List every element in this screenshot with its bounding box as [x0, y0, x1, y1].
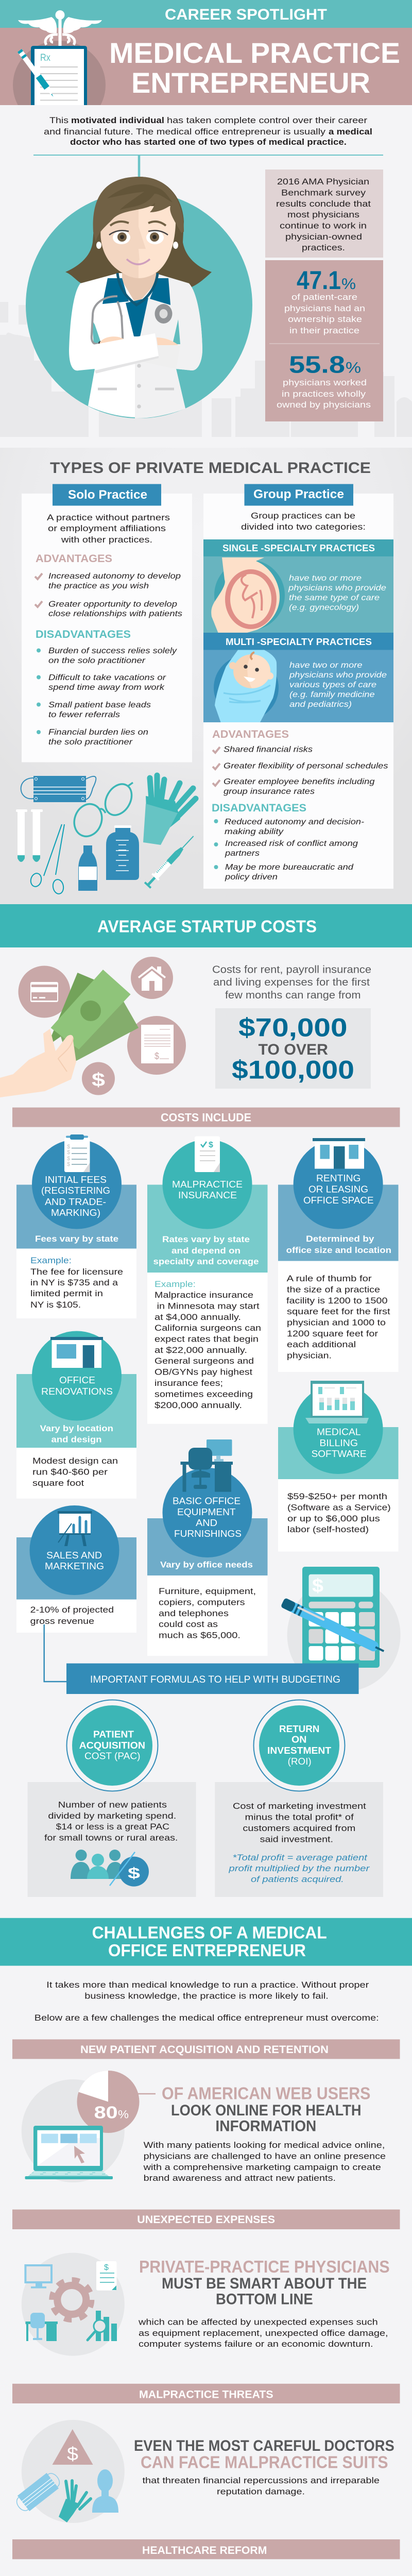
multi-specialty sub-panel	[203, 633, 393, 722]
panel: return on investment: RETURN	[279, 1724, 319, 1734]
icon: dollar	[82, 1062, 115, 1095]
stat panel: ownership percentages	[265, 260, 383, 421]
solo disadvantages: Financial burden lies on	[48, 728, 148, 737]
icon: gloves	[143, 775, 196, 845]
decorative icon: calculator and pen	[281, 1567, 401, 1692]
banner: important formulas: IMPORTANT FORMULAS TO HELP WITH BUDGETING	[90, 1674, 340, 1685]
single-specialty sub-panel: the same type of care	[289, 594, 380, 602]
cost card: basic office equipment and furnishings: could cost as	[159, 1619, 218, 1629]
intro paragraph: motivated individual	[71, 115, 164, 125]
cost card: medical billing software: labor (self-hosted)	[287, 1524, 369, 1534]
cost card: renting or leasing office space: A rule of thumb for	[287, 1274, 372, 1283]
cost card: basic office equipment and furnishings: much as $65,000.	[159, 1631, 241, 1640]
icon: gear, monitor, desk, chart: $	[104, 2263, 109, 2272]
solo advantages: Increased autonomy to develop	[48, 572, 181, 581]
group advantages: group insurance rates	[224, 787, 315, 796]
multi-specialty sub-panel: physicians who provide	[289, 671, 387, 680]
startup cost callout: few months can range from	[225, 990, 360, 1001]
solo disadvantages: on the solo practitioner	[48, 656, 146, 665]
icon: gear, monitor, desk, chart	[22, 2253, 125, 2356]
cost card: medical billing software: $59-$250+ per month	[287, 1492, 387, 1501]
stat: 55.8%: owned by physicians	[277, 400, 371, 410]
cost card: initial fees: The fee for licensure	[30, 1267, 123, 1277]
cost card: office renovations: square foot	[32, 1478, 84, 1488]
solo disadvantages: spend time away from work	[48, 683, 165, 692]
banner: costs include: COSTS INCLUDE	[161, 1111, 251, 1124]
cost card: office renovations: Vary by location	[40, 1423, 113, 1433]
stat: 47.1%: ownership stake	[288, 314, 362, 324]
banner: important formulas	[66, 1664, 358, 1694]
panel: patient acquisition cost	[28, 1700, 196, 1897]
panel: solo practice: or employment affiliations	[48, 523, 166, 533]
single-specialty sub-panel: (e.g. gynecology)	[289, 603, 359, 612]
panel: return on investment: INVESTMENT	[267, 1745, 331, 1756]
cost card: sales and marketing	[16, 1505, 136, 1633]
icon: syringe	[144, 833, 197, 889]
stethoscope	[117, 273, 158, 305]
cost card: basic office equipment and furnishings: and telephones	[159, 1608, 229, 1618]
single-specialty sub-panel	[203, 539, 393, 633]
header banner	[0, 0, 412, 105]
single-specialty sub-panel: have two or more	[289, 574, 362, 583]
single-specialty sub-panel: physicians who provide	[288, 584, 386, 592]
icon: medicine jar	[106, 825, 139, 880]
face	[100, 206, 139, 278]
cost card: initial fees: Fees vary by state	[35, 1234, 118, 1244]
footnote	[228, 1853, 370, 1884]
startup cost callout: $100,000	[232, 1055, 354, 1084]
cost card: basic office equipment and furnishings: Furniture, equipment,	[159, 1586, 256, 1596]
cost card: medical billing software: SOFTWARE	[312, 1449, 367, 1459]
cost card: initial fees: in NY is $735 and a	[30, 1278, 118, 1287]
cost card: malpractice insurance: MALPRACTICE	[172, 1179, 243, 1190]
solo disadvantages	[36, 629, 177, 747]
stat: 55.8%: physicians worked	[283, 378, 367, 387]
stat: 47.1%	[284, 266, 365, 335]
main title	[109, 37, 400, 99]
headline	[134, 2437, 394, 2472]
intro paragraph: This	[49, 115, 68, 125]
banner: healthcare reform	[12, 2539, 400, 2559]
icon: credit card	[19, 965, 70, 1018]
cost card: office renovations: run $40-$60 per	[32, 1467, 108, 1477]
panel: patient acquisition cost: Number of new patients	[58, 1800, 167, 1810]
icon: forceps	[29, 824, 64, 895]
cost card: office renovations: Modest design can	[32, 1456, 118, 1466]
panel: patient acquisition cost: ACQUISITION	[79, 1740, 145, 1751]
cost card: malpractice insurance: California surgeons can	[154, 1323, 261, 1333]
group disadvantages	[212, 802, 364, 882]
cost card: renting or leasing office space: physician and 1000 to	[287, 1318, 386, 1327]
footnote: *Total profit = average patient	[233, 1853, 368, 1862]
icon: insurance document: $	[209, 1141, 213, 1149]
group disadvantages: DISADVANTAGES	[212, 802, 306, 814]
panel: solo practice: Solo Practice	[68, 488, 147, 502]
cost card: malpractice insurance: insurance fees;	[154, 1378, 223, 1388]
banner: unexpected expenses: UNEXPECTED EXPENSES	[137, 2214, 275, 2226]
cost card: sales and marketing: gross revenue	[30, 1616, 94, 1626]
body text: as equipment replacement, unexpected office damage,	[139, 2328, 388, 2338]
icon: storefront	[50, 1337, 103, 1368]
cost card: initial fees: limited permit in	[30, 1289, 103, 1298]
headline: LOOK ONLINE FOR HEALTH	[171, 2102, 362, 2119]
panel: return on investment: minus the total profit* of	[245, 1812, 354, 1822]
cost card: malpractice insurance: Example:	[154, 1279, 196, 1289]
group advantages	[212, 728, 388, 796]
main title: ENTREPRENEUR	[131, 66, 370, 99]
headline: BOTTOM LINE	[216, 2291, 313, 2308]
panel: group practice: Group practices can be	[251, 511, 355, 521]
cost card: renting or leasing office space: OR LEASING	[308, 1184, 368, 1195]
challenges intro text: It takes more than medical knowledge to run a practice. Without proper	[46, 1980, 369, 1990]
main title: MEDICAL PRACTICE	[109, 37, 400, 69]
single-specialty sub-panel: SINGLE -SPECIALTY PRACTICES	[222, 543, 375, 553]
icon: fee checklist: $	[67, 1161, 70, 1167]
header kicker: CAREER SPOTLIGHT	[165, 6, 327, 23]
stat panel: AMA survey: 2016 AMA Physician	[277, 177, 369, 187]
body text: computer systems failure or an economic downturn.	[139, 2339, 373, 2349]
cost card: basic office equipment and furnishings: copiers, computers	[159, 1598, 245, 1607]
section band: average startup costs: AVERAGE STARTUP COSTS	[97, 917, 317, 936]
stat panel: AMA survey: continue to work in	[280, 221, 367, 231]
cost card: initial fees: AND TRADE-	[45, 1197, 106, 1207]
stat: 47.1%: 47.1	[297, 266, 341, 295]
solo advantages	[35, 553, 182, 618]
icon: billing laptop	[305, 1381, 369, 1423]
icon: prescription clipboard and caduceus: Rx	[40, 53, 50, 63]
icon: prescription clipboard and caduceus	[13, 10, 106, 105]
cost card: initial fees: MARKING)	[51, 1208, 100, 1218]
group disadvantages: making ability	[225, 827, 284, 836]
cost card: medical billing software: (Software as a Service)	[287, 1502, 391, 1512]
solo advantages: ADVANTAGES	[36, 553, 112, 565]
cost card: malpractice insurance	[147, 1137, 268, 1424]
stat: 55.8%: 55.8	[289, 351, 345, 378]
cost card: renting or leasing office space: 1200 square feet for	[287, 1329, 378, 1338]
stat panel: AMA survey: most physicians	[287, 210, 359, 219]
icon: bottle	[78, 845, 97, 891]
icon: fee checklist: $	[67, 1144, 70, 1150]
cost card: sales and marketing: MARKETING	[45, 1561, 104, 1571]
cost card: renting or leasing office space: the size of a practice	[287, 1285, 380, 1294]
panel: return on investment: said investment.	[260, 1834, 333, 1844]
doctor illustration	[26, 177, 252, 418]
skyline background	[0, 302, 412, 437]
panel: patient acquisition cost: divided by marketing spend.	[48, 1811, 176, 1821]
hair, back	[65, 177, 212, 287]
group disadvantages: Increased risk of conflict among	[225, 839, 358, 848]
cost card: malpractice insurance: and depend on	[171, 1246, 241, 1256]
cost card: renting or leasing office space: OFFICE SPACE	[303, 1195, 374, 1206]
icon: pregnant belly	[211, 557, 285, 633]
illustration: medical supplies	[16, 775, 197, 895]
startup cost callout: and living expenses for the first	[213, 977, 370, 988]
multi-specialty sub-panel: various types of care	[289, 681, 376, 689]
cost card: malpractice insurance: OB/GYNs pay highest	[154, 1367, 252, 1377]
icon: fee checklist: $	[67, 1149, 70, 1156]
panel: solo practice: with other practices.	[61, 535, 152, 545]
icon: surgical mask	[21, 776, 96, 802]
panel: patient acquisition cost: PATIENT	[93, 1730, 134, 1740]
headline: OF AMERICAN WEB USERS	[162, 2083, 370, 2103]
icon: laptop and 80% pie chart: 80	[94, 2103, 118, 2122]
cost card: malpractice insurance: at $22,000 annually.	[154, 1345, 247, 1355]
panel: return on investment	[215, 1700, 383, 1897]
body text: reputation damage.	[217, 2487, 305, 2497]
stat: 47.1%: of patient-care	[291, 292, 357, 302]
cost card: renting or leasing office space: physician.	[287, 1351, 332, 1361]
solo disadvantages: to fewer referrals	[48, 710, 120, 719]
coat pockets and buttons	[98, 364, 174, 409]
headline: PRIVATE-PRACTICE PHYSICIANS	[139, 2257, 390, 2276]
banner: healthcare reform: HEALTHCARE REFORM	[142, 2545, 267, 2556]
headline	[162, 2083, 370, 2134]
cost card: renting or leasing office space: Determined by	[306, 1234, 374, 1244]
panel: group practice: divided into two categories:	[241, 522, 366, 532]
banner: unexpected expenses	[12, 2210, 400, 2229]
intro paragraph: and financial future. The medical office entrepreneur is usually	[44, 127, 326, 137]
cost card: basic office equipment and furnishings: BASIC OFFICE	[173, 1496, 241, 1506]
stat: 55.8%	[277, 351, 371, 410]
cost card: medical billing software: MEDICAL	[317, 1427, 360, 1437]
solo disadvantages: the solo practitioner	[48, 738, 133, 747]
body text: brand awareness and attract new patients.	[144, 2173, 336, 2183]
startup cost callout: Costs for rent, payroll insurance	[212, 964, 371, 976]
heading: TYPES OF PRIVATE MEDICAL PRACTICE	[50, 460, 371, 477]
cost card: office renovations: and design	[52, 1434, 102, 1445]
stat: 55.8%: %	[346, 360, 361, 376]
cost card: malpractice insurance: in Minnesota may start	[157, 1301, 260, 1311]
neck and scrubs	[122, 273, 158, 305]
icon: laptop and 80% pie chart	[22, 2071, 156, 2182]
section: types of private medical practice	[0, 448, 412, 904]
panel: patient acquisition cost: COST (PAC)	[84, 1751, 140, 1761]
decorative icon: calculator and pen: $	[312, 1575, 323, 1596]
teal circle backdrop	[26, 192, 252, 418]
cost card: renting or leasing office space: square feet for the first	[287, 1307, 390, 1316]
body text: which can be affected by unexpected expenses such	[138, 2317, 378, 2327]
startup cost callout: $70,000	[238, 1013, 347, 1042]
body text: that threaten financial repercussions and irreparable	[142, 2476, 380, 2485]
solo disadvantages: Difficult to take vacations or	[48, 673, 166, 682]
illustration: hand holding money with expense icons	[0, 957, 186, 1097]
cost card: malpractice insurance: expect rates that begin	[154, 1334, 259, 1344]
stat: 47.1%: in their practice	[289, 326, 359, 335]
panel: patient acquisition cost: for small towns or rural areas.	[44, 1833, 178, 1843]
arrow: connector to formulas banner	[44, 1624, 66, 1682]
headline: MUST BE SMART ABOUT THE	[162, 2275, 367, 2292]
panel: solo practice: A practice without partners	[47, 513, 170, 522]
cost card: renting or leasing office space: facility is 1200 to 1500	[286, 1296, 387, 1306]
body text	[142, 2476, 380, 2497]
panel: group practice: Group Practice	[253, 487, 344, 501]
cost card: medical billing software: BILLING	[319, 1438, 358, 1448]
stat panel: AMA survey	[265, 170, 383, 258]
banner: malpractice threats: MALPRACTICE THREATS	[139, 2389, 273, 2401]
multi-specialty sub-panel: (e.g. family medicine	[289, 690, 375, 699]
icon: laptop and 80% pie chart: %	[118, 2108, 129, 2121]
cost card: initial fees: NY is $105.	[30, 1300, 81, 1310]
cost card: initial fees: Example:	[30, 1256, 72, 1265]
multi-specialty sub-panel: and pediatrics)	[289, 700, 352, 709]
cost card: renting or leasing office space: office size and location	[286, 1245, 391, 1255]
icon: banknotes in hand	[0, 970, 139, 1097]
section band: challenges: CHALLENGES OF A MEDICAL	[92, 1923, 327, 1942]
banner: new patient acquisition	[12, 2039, 400, 2059]
headline	[139, 2257, 390, 2308]
startup cost callout: TO OVER	[259, 1041, 328, 1058]
footnote: profit multiplied by the number	[228, 1863, 370, 1873]
cost card: initial fees: INITIAL FEES	[45, 1175, 107, 1185]
panel: return on investment: ON	[291, 1735, 306, 1745]
stat: 55.8%: in practices wholly	[282, 389, 366, 399]
cost card: malpractice insurance: General surgeons and	[154, 1356, 254, 1366]
solo disadvantages: Small patient base leads	[48, 701, 151, 709]
cost card: medical billing software: or up to $6,000 plus	[287, 1514, 380, 1523]
banner: costs include	[12, 1108, 400, 1127]
icon: presentation board	[58, 1511, 92, 1546]
challenges intro text: business knowledge, the practice is more likely to fail.	[84, 1991, 329, 2001]
icon: swaddled baby	[214, 650, 279, 722]
cost card: malpractice insurance: Malpractice insurance	[154, 1290, 253, 1300]
cost card: sales and marketing: SALES AND	[46, 1550, 102, 1561]
headline: CAN FACE MALPRACTICE SUITS	[141, 2453, 388, 2472]
cost card: office renovations: RENOVATIONS	[41, 1386, 113, 1397]
cost card: malpractice insurance: $200,000 annually.	[154, 1400, 242, 1410]
icon: invoice: $	[154, 1051, 159, 1061]
intro paragraph: doctor who has started one of two types of medical practice.	[70, 137, 347, 147]
body text: with a comprehensive marketing campaign to create	[143, 2162, 381, 2172]
headline: INFORMATION	[215, 2117, 316, 2134]
challenge: patient acquisition	[22, 2071, 386, 2183]
panel: return on investment: (ROI)	[288, 1756, 312, 1767]
headline: EVEN THE MOST CAREFUL DOCTORS	[134, 2437, 394, 2454]
challenge: malpractice threats	[13, 2420, 394, 2523]
challenges intro text: Below are a few challenges the medical office entrepreneur must overcome:	[35, 2013, 379, 2023]
multi-specialty sub-panel: have two or more	[289, 661, 363, 670]
stat: 47.1%: %	[341, 276, 356, 293]
cost card: malpractice insurance: specialty and coverage	[153, 1257, 259, 1266]
icon: fee checklist	[64, 1134, 90, 1172]
solo advantages: the practice as you wish	[48, 582, 149, 590]
cost card: basic office equipment and furnishings	[147, 1439, 268, 1656]
icon: patients and dollar	[71, 1850, 149, 1887]
icon: office building	[313, 1138, 365, 1168]
cost card: basic office equipment and furnishings: Vary by office needs	[160, 1560, 253, 1570]
group advantages: Greater flexibility of personal schedules	[224, 761, 388, 771]
section band: challenges	[0, 1918, 412, 1966]
cost card: office renovations: OFFICE	[59, 1375, 95, 1385]
section band: average startup costs	[0, 904, 412, 947]
icon: insurance document	[195, 1137, 220, 1172]
hair, front	[93, 177, 184, 242]
solo advantages: Greater opportunity to develop	[48, 600, 177, 609]
cost card: malpractice insurance: Rates vary by state	[162, 1234, 250, 1244]
eyes and brows	[109, 222, 168, 244]
intro paragraph	[44, 115, 372, 147]
cost card: renting or leasing office space: RENTING	[316, 1173, 360, 1183]
stat: 47.1%: physicians had an	[284, 303, 365, 313]
stat panel: AMA survey: physician-owned	[285, 232, 362, 242]
solo advantages: close relationships with patients	[48, 609, 182, 618]
panel: group practice	[203, 484, 393, 889]
solo disadvantages: Burden of success relies solely	[48, 647, 177, 655]
coat	[69, 273, 202, 417]
section band: challenges: OFFICE ENTREPRENEUR	[108, 1941, 306, 1960]
banner: malpractice threats	[12, 2384, 400, 2403]
icon: fee checklist: $	[67, 1156, 70, 1162]
icon: warning triangle, mask, glove, patient: $	[67, 2443, 78, 2464]
icon: dollar: $	[92, 1069, 105, 1090]
icon: warning triangle, mask, glove, patient	[13, 2420, 125, 2523]
stat panel: AMA survey: Benchmark survey	[281, 188, 366, 198]
challenge: unexpected expenses	[22, 2253, 390, 2356]
body text: With many patients looking for medical advice online,	[144, 2140, 385, 2150]
group disadvantages: Reduced autonomy and decision-	[225, 818, 364, 826]
icon: patients and dollar: $	[128, 1865, 140, 1882]
cost card: basic office equipment and furnishings: AND	[196, 1518, 217, 1528]
panel: return on investment: customers acquired from	[243, 1823, 355, 1833]
cost card: basic office equipment and furnishings: EQUIPMENT	[177, 1507, 236, 1517]
group disadvantages: policy driven	[225, 873, 278, 882]
stat panel: AMA survey: practices.	[302, 243, 345, 252]
challenges intro text	[35, 1980, 379, 2023]
cost card: initial fees: (REGISTERING	[41, 1185, 110, 1196]
body text	[138, 2317, 388, 2349]
icon: house	[131, 957, 173, 999]
stat panel: AMA survey: results conclude that	[276, 199, 371, 209]
cost card: sales and marketing: 2-10% of projected	[30, 1605, 114, 1615]
icon: desk and chair	[180, 1439, 233, 1492]
intro paragraph: has taken complete control over their career	[167, 115, 367, 125]
icon: invoice	[127, 1016, 186, 1075]
panel: return on investment: Cost of marketing investment	[233, 1801, 366, 1811]
multi-specialty sub-panel: MULTI -SPECIALTY PRACTICES	[226, 637, 372, 647]
body text	[143, 2140, 386, 2183]
cost card: malpractice insurance: at $4,000 annually.	[154, 1312, 241, 1322]
panel: patient acquisition cost: $14 or less is a great PAC	[56, 1822, 169, 1832]
group advantages: Greater employee benefits including	[224, 777, 375, 786]
crossed arms	[100, 336, 126, 344]
group disadvantages: partners	[225, 849, 260, 858]
cost card: office renovations	[16, 1331, 136, 1499]
icon: test tubes	[16, 809, 43, 862]
cost card: renting or leasing office space: each additional	[287, 1340, 356, 1349]
cost card: medical billing software	[278, 1381, 399, 1552]
cost card: malpractice insurance: INSURANCE	[178, 1190, 237, 1200]
cost card: basic office equipment and furnishings: FURNISHINGS	[174, 1529, 242, 1539]
footnote: of patients acquired.	[251, 1874, 344, 1884]
intro paragraph: a medical	[329, 127, 372, 137]
panel: solo practice	[22, 484, 192, 762]
group advantages: Shared financial risks	[224, 745, 313, 754]
group advantages: ADVANTAGES	[212, 728, 289, 740]
startup cost callout	[212, 964, 371, 1089]
icon: glasses	[70, 779, 137, 840]
group disadvantages: May be more bureaucratic and	[225, 863, 354, 872]
cost card: malpractice insurance: sometimes exceeding	[154, 1389, 253, 1399]
cost card: renting or leasing office space	[278, 1138, 399, 1372]
solo disadvantages: DISADVANTAGES	[36, 629, 131, 640]
cost card: initial fees	[16, 1134, 136, 1318]
banner: new patient acquisition: NEW PATIENT ACQUISITION AND RETENTION	[80, 2044, 329, 2056]
body text: physicians are challenged to have an online presence	[144, 2151, 386, 2161]
